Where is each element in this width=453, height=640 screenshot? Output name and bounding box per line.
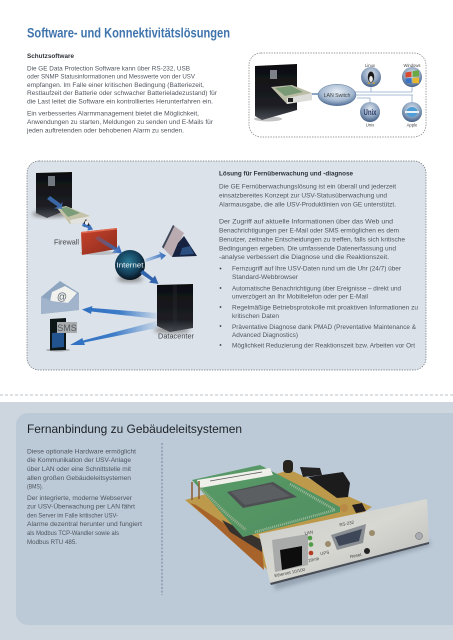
arrow: firewall to internet [95, 236, 122, 254]
LAN switch [318, 84, 356, 106]
icon: Linux: Linux [365, 63, 376, 68]
arrow: UPS to card [47, 196, 62, 209]
diagram: LAN network [249, 53, 426, 137]
bullet: diagnostics: Advanced Diagnostics) [232, 332, 298, 339]
paragraph: access: Benutzer, zeitnahe Entscheidungen zu treffen, falls sich kritische [219, 237, 405, 244]
paragraph: web server: Modbus RTU 485. [27, 539, 77, 546]
paragraph: web server [27, 495, 142, 546]
bullet: diagnostics [220, 324, 417, 339]
paragraph: access: Bedingungen ergeben. Die umfassende Datenerfassung und [219, 245, 396, 252]
panel: building management [0, 402, 453, 640]
icon: smartphone SMS: SMS [57, 323, 77, 333]
heading: Fernanbindung zu Gebäudeleitsystemen [27, 423, 242, 436]
network lines [311, 87, 413, 103]
bullet: logs: Regelmäßige Betriebsprotokolle mit proaktiven Informationen zu [232, 305, 418, 312]
ethernet port [272, 534, 308, 572]
icon: network card [57, 206, 91, 227]
diagram: remote monitoring flow [32, 172, 197, 352]
paragraph: solution: einsatzbereites Konzept zur USV-Statusüberwachung und [219, 192, 387, 199]
paragraph: solution [219, 183, 396, 208]
icon: UPS cabinet [32, 172, 72, 218]
bullet: remote access [220, 266, 402, 281]
icon: Unix: Unix [366, 122, 375, 128]
paragraph: web server: Alarme dezentral herunter und fungiert [27, 521, 142, 528]
text block: Schutzsoftware [26, 53, 218, 134]
paragraph: software description: Die GE Data Protection Software kann über RS-232, USB [27, 65, 191, 72]
inner panel [16, 413, 453, 625]
icon: internet globe [115, 250, 145, 282]
subheading: Schutzsoftware: Schutzsoftware [27, 53, 74, 60]
icon: Unix: Unix [364, 108, 377, 117]
silver front plate [259, 499, 429, 585]
bullet: diagnostics: Präventative Diagnose dank PMAD (Preventative Maintenance & [232, 324, 417, 331]
icon: Unix [360, 102, 380, 128]
dashed frame [249, 53, 426, 137]
arrow: card to firewall [82, 223, 93, 230]
bullet: reaction time: Möglichkeit Reduzierung der Reaktionszeit bzw. Arbeiten vor Ort [232, 343, 415, 350]
mounting hole [416, 532, 422, 540]
arrow: internet to datacenter [140, 270, 158, 284]
text block: remote monitoring intro [219, 171, 405, 261]
paragraph: access: Der Zugriff auf aktuelle Informationen über das Web und [219, 219, 393, 226]
paragraph: access: -analyse verbessert die Diagnose und die Reaktionszeit. [219, 254, 389, 261]
paragraph: hardware option [27, 448, 136, 491]
bullet list: features [220, 266, 418, 350]
paragraph: hardware option: über LAN oder eine Schnittstelle mit [27, 466, 131, 473]
port labels: Ethernet 10/100 [274, 567, 306, 578]
icon: e-mail envelope [41, 281, 79, 314]
paragraph: alarm management [26, 111, 214, 134]
port labels: Reset [350, 552, 363, 559]
icon: internet globe: Internet [116, 261, 144, 270]
green module [192, 465, 340, 537]
paragraph: web server: als Modbus TCP-Wandler sowie als [27, 530, 120, 537]
relays and capacitor [283, 460, 366, 513]
icon: UPS cabinet with card [254, 64, 312, 122]
paragraph: alarm management: jeden auftretenden oder behobenen Alarm zu senden. [26, 127, 184, 134]
icon: firewall [80, 228, 117, 255]
card shadow [272, 540, 430, 590]
paragraph: software description: empfangen. Im Falle einer kritischen Bedingung (Batteriezeit, [27, 82, 204, 89]
port labels [274, 519, 363, 578]
bullet: notification: Automatische Benachrichtigung über Ereignisse – direkt und [232, 286, 401, 293]
icon: Apple: Apple [407, 122, 418, 128]
paragraph: web server: den Server im Falle kritischer USV- [27, 512, 118, 519]
icon: Windows [402, 63, 422, 87]
icon: laptop [162, 225, 197, 257]
paragraph: hardware option: (BMS). [27, 484, 43, 491]
bullet: notification [220, 286, 401, 301]
paragraph: hardware option: die Kommunikation der USV-Anlage [27, 457, 131, 464]
paragraph: hardware option: allen großen Gebäudeleitsystemen [27, 475, 131, 482]
paragraph: solution: Alarmausgabe, die alle USV-Produktlinien von GE unterstützt. [219, 201, 396, 208]
label: Datacenter: Datacenter [158, 332, 195, 340]
bullet: logs: kritischen Daten [232, 313, 279, 320]
RS-232 connector [325, 524, 375, 550]
paragraph: software description: die Last leitet die Software ein kontrolliertes Herunterfahren ein. [27, 98, 213, 105]
paragraph: alarm management: Anwendungen zu starten, Meldungen zu senden und E-Mails für [27, 119, 214, 126]
arrow: datacenter to smartphone [70, 321, 157, 345]
panel: remote monitoring [27, 161, 426, 370]
paragraph: access: Benachrichtigungen per E-Mail oder SMS ermöglichen es dem [219, 228, 399, 235]
subheading: Lösung für Fernüberwachung und -diagnose [219, 171, 353, 178]
bullet: logs [220, 305, 418, 320]
icon: e-mail envelope: @ [57, 292, 67, 303]
paragraph: web server: Der integrierte, moderne Webserver [27, 495, 133, 502]
bullet: notification: unverzögert an Ihr Mobiltelefon oder per E-Mail [232, 294, 369, 301]
paragraph: solution: Die GE Fernüberwachungslösung ist ein überall und jederzeit [219, 183, 396, 190]
LAN switch: LAN Switch [324, 93, 351, 99]
label: Firewall: Firewall [54, 238, 79, 246]
title: Software- und Konnektivitätslösungen [27, 26, 230, 40]
arrow: internet to laptop [145, 252, 166, 262]
bullet: remote access: Fernzugriff auf Ihre USV-Daten rund um die Uhr (24/7) über [232, 266, 402, 273]
paragraph: software description: Restlaufzeit der Batterie oder schwacher Batterieladezustand) für [27, 90, 218, 97]
paragraph: software description [27, 65, 218, 105]
paragraph: web server: zur USV-Überwachung per LAN fährt [27, 503, 135, 511]
bullet: remote access: Standard-Webbrowser [232, 274, 299, 281]
paragraph: alarm management: Ein verbessertes Alarmmanagement bietet die Möglichkeit, [27, 111, 199, 118]
paragraph: hardware option: Diese optionale Hardware ermöglicht [27, 448, 136, 455]
port labels: LAN [304, 529, 313, 536]
arrow: datacenter to envelope [82, 306, 157, 319]
icon: Apple [402, 102, 422, 128]
icon: smartphone SMS [46, 318, 77, 352]
port labels: 20mb [308, 556, 320, 563]
icon: Windows: Windows [404, 63, 420, 68]
port labels: RS-232 [339, 519, 355, 528]
port labels: UPS [320, 550, 330, 556]
icon: Linux [361, 63, 381, 87]
base circuit board [185, 470, 372, 572]
status LEDs [308, 536, 313, 555]
paragraph: software description: oder SNMP Statusinformationen und Messwerte von der USV [27, 74, 196, 81]
outer band [0, 402, 453, 640]
paragraph: access [219, 219, 405, 261]
icon: datacenter [154, 284, 193, 333]
photo: network card [185, 460, 430, 590]
panel background [27, 161, 426, 370]
reset button [364, 548, 370, 554]
